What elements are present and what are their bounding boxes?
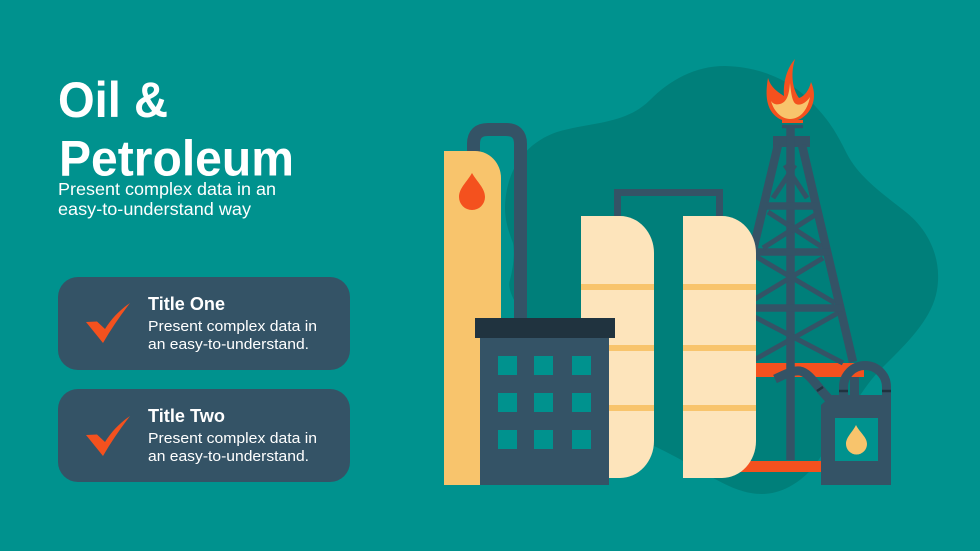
oil can — [775, 366, 891, 485]
card one heading: Title One — [148, 294, 225, 314]
left yellow tower pipe — [474, 130, 520, 320]
right cream tank — [683, 216, 756, 478]
subtitle — [58, 179, 276, 219]
card one text: Present complex data in — [148, 319, 317, 335]
flame — [767, 59, 814, 123]
orange pipes — [740, 363, 864, 472]
derrick tower — [727, 126, 853, 460]
title — [58, 72, 294, 186]
can drop icon — [846, 425, 867, 454]
connector pipe — [618, 192, 720, 220]
check icon two — [86, 416, 130, 456]
left cream tank — [581, 216, 654, 478]
card two text: an easy-to-understand. — [148, 449, 309, 465]
building — [475, 318, 615, 485]
title: Petroleum — [59, 130, 294, 186]
card two text: Present complex data in — [148, 431, 317, 447]
card: title one — [58, 277, 350, 370]
background blob — [505, 66, 938, 494]
subtitle: easy-to-understand way — [58, 199, 251, 219]
card two heading: Title Two — [148, 406, 225, 426]
flame base — [782, 120, 803, 123]
subtitle: Present complex data in an — [58, 179, 276, 199]
card: title two — [58, 389, 350, 482]
card two text — [148, 431, 317, 465]
oil drop icon — [459, 173, 485, 210]
building windows — [498, 356, 591, 449]
check icon one — [86, 303, 130, 343]
card one text — [148, 319, 317, 353]
yellow tower — [444, 151, 501, 485]
card one text: an easy-to-understand. — [148, 337, 309, 353]
title: Oil & — [58, 72, 168, 128]
